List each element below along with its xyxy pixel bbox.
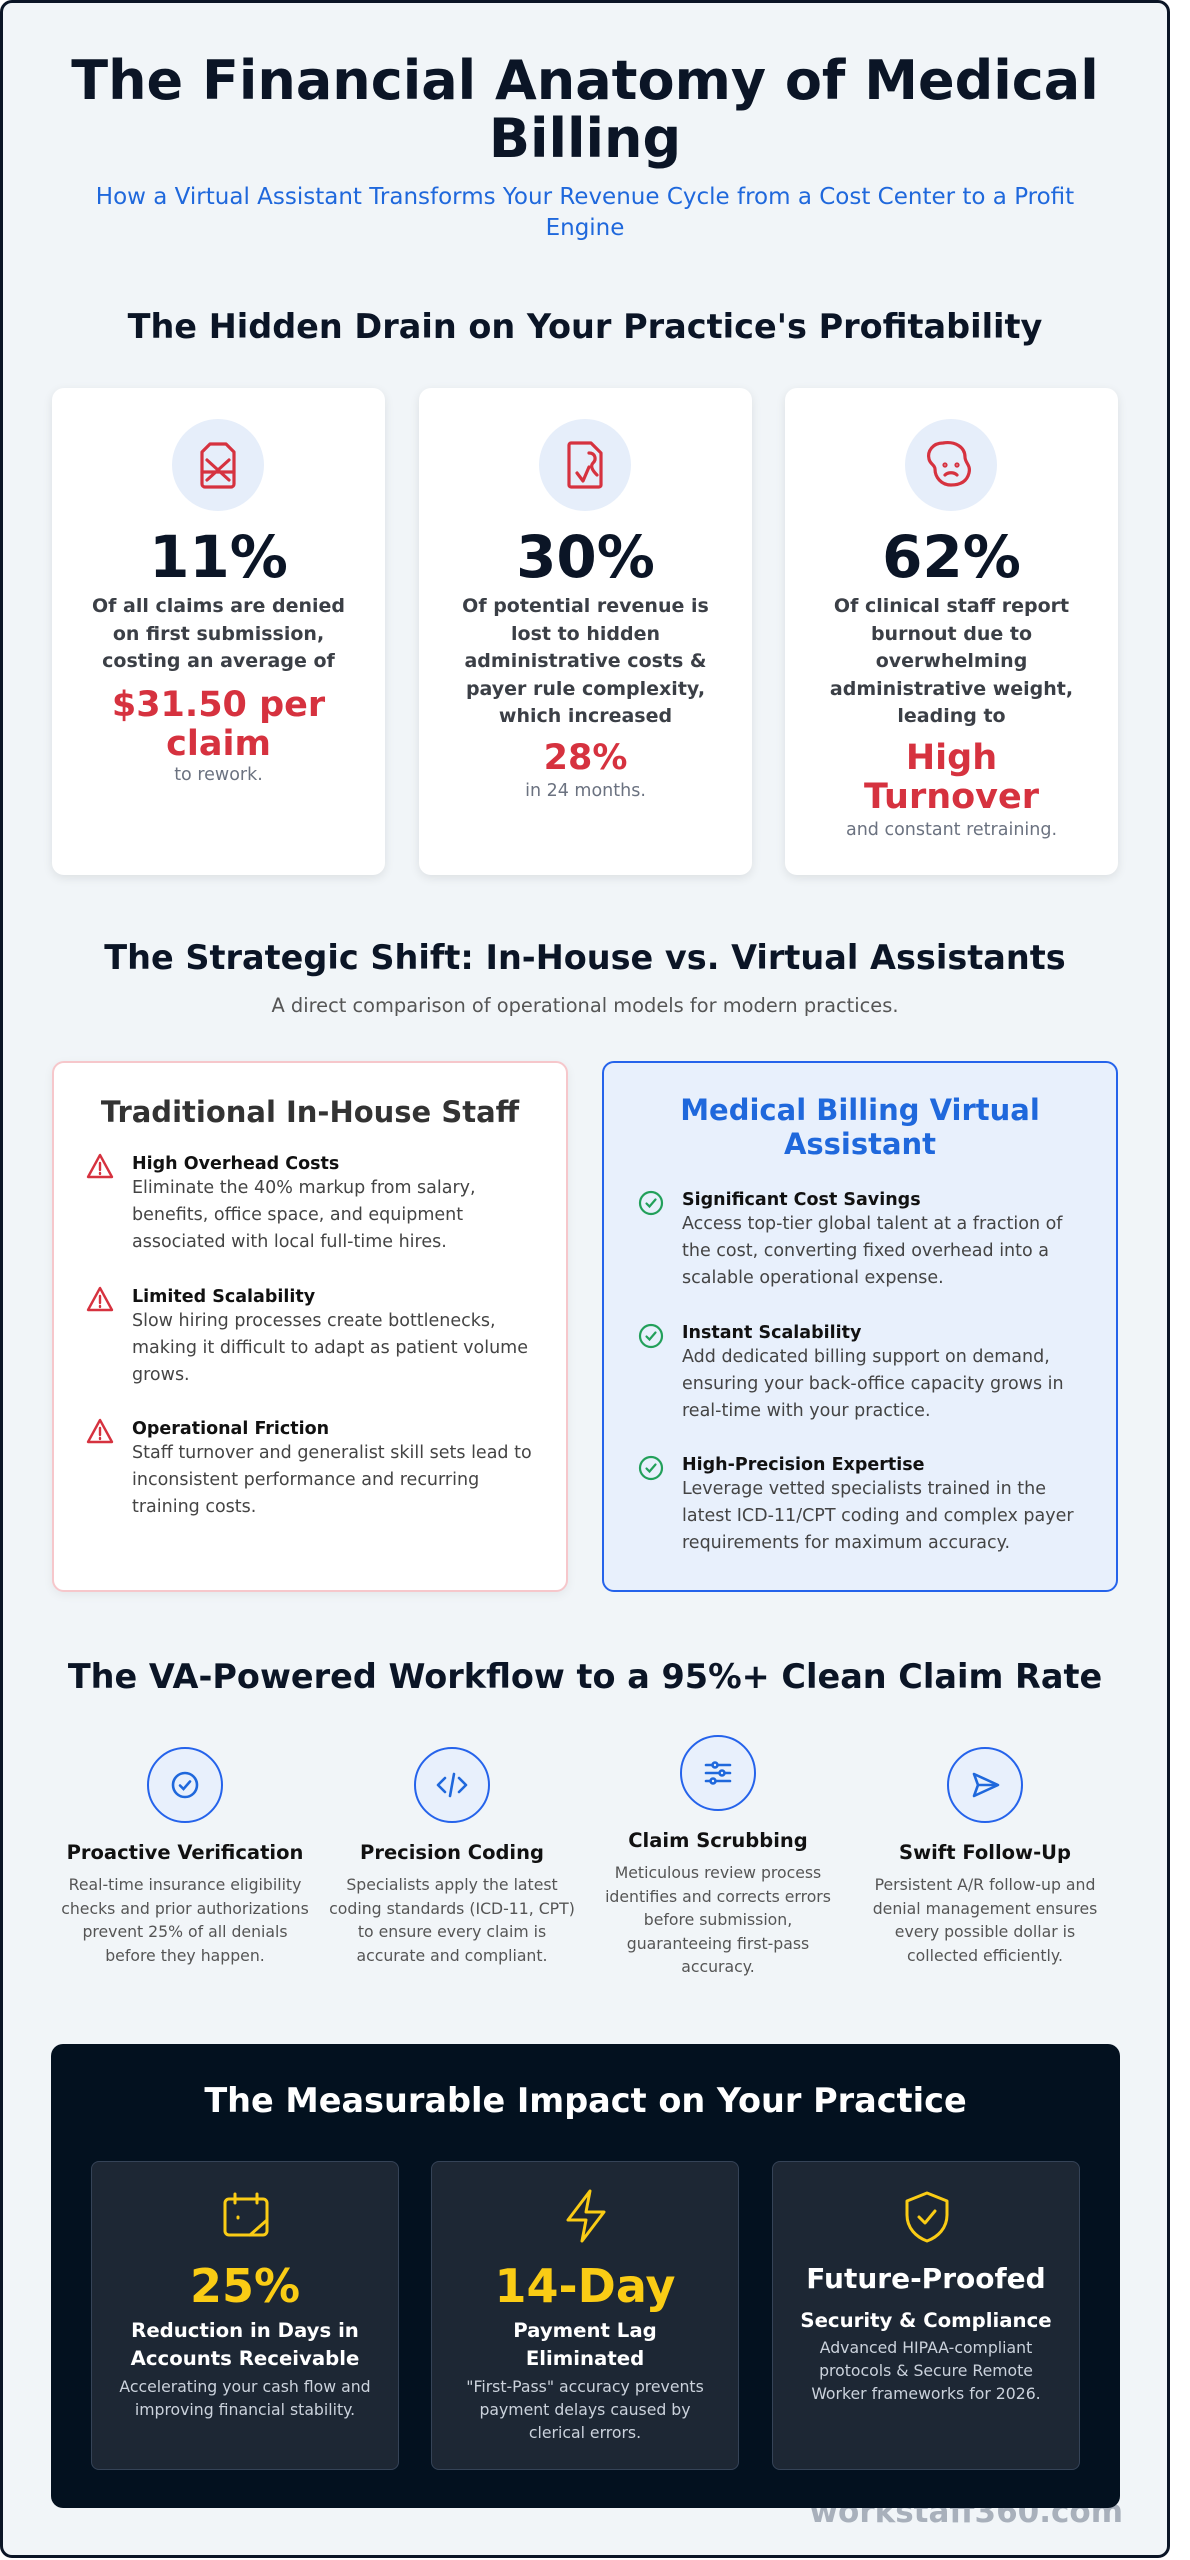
panel: virtual assistant [602, 1061, 1118, 1592]
impact card: future-proofed: Advanced HIPAA-compliant [820, 2338, 1032, 2357]
impact card: 25%: improving financial stability. [135, 2400, 355, 2419]
step: swift follow-up: denial management ensures [873, 1898, 1097, 1918]
subtitle: Engine [546, 215, 624, 241]
title [71, 49, 1099, 170]
step: proactive verification [61, 1747, 309, 1964]
item: cost savings: scalable operational expense. [682, 1268, 944, 1288]
icon: code [414, 1747, 490, 1823]
small note: and constant retraining. [846, 820, 1057, 840]
item: high overhead: Eliminate the 40% markup from salary, [132, 1178, 476, 1198]
step: precision coding: to ensure every claim is [358, 1922, 546, 1941]
description: which increased [499, 705, 672, 727]
step: proactive verification: Real-time insurance eligibility [69, 1875, 301, 1894]
heading: hidden drain: The Hidden Drain on Your Practice's Profitability [128, 307, 1042, 346]
impact card: 14-day: Payment Lag [513, 2319, 657, 2342]
description: burnout due to [871, 623, 1032, 645]
item: high-precision expertise [638, 1455, 1074, 1553]
item: instant scalability: real-time with your practice. [682, 1401, 931, 1421]
item: high overhead: High Overhead Costs [132, 1154, 339, 1174]
item: instant scalability: ensuring your back-office capacity grows in [682, 1374, 1064, 1394]
step: claim scrubbing: Claim Scrubbing [628, 1829, 808, 1852]
panel: measurable impact [51, 2044, 1120, 2508]
subtitle: How a Virtual Assistant Transforms Your Revenue Cycle from a Cost Center to a Profit [96, 184, 1074, 210]
item: instant scalability [638, 1323, 1064, 1421]
description: overwhelming [876, 650, 1027, 672]
card: 62% [785, 388, 1118, 875]
impact card: future-proofed: Security & Compliance [800, 2309, 1052, 2332]
item: high overhead [86, 1154, 476, 1252]
panel heading [680, 1093, 1040, 1161]
title: The Financial Anatomy of Medical [71, 49, 1099, 112]
step: precision coding: Precision Coding [360, 1841, 544, 1864]
impact card: 14-day: 14-Day [495, 2259, 675, 2313]
panel heading: The Measurable Impact on Your Practice [204, 2081, 967, 2120]
item: instant scalability: Add dedicated billing support on demand, [682, 1347, 1050, 1367]
impact card: 25%: Reduction in Days in [131, 2319, 359, 2342]
step: swift follow-up: Persistent A/R follow-up and [875, 1875, 1095, 1894]
step: precision coding [329, 1747, 575, 1964]
item: limited scalability [86, 1286, 528, 1385]
subtitle [96, 184, 1074, 241]
item: high-precision expertise: Leverage vetted specialists trained in the [682, 1479, 1046, 1499]
step: claim scrubbing: guaranteeing first-pass [627, 1934, 809, 1952]
stat number: 30% [516, 523, 655, 591]
icon: check circle [147, 1747, 223, 1823]
watermark: workstaff360.com [809, 2494, 1123, 2530]
heading: workflow: The VA-Powered Workflow to a 95%+ Clean Claim Rate [68, 1657, 1102, 1696]
icon: sliders [680, 1735, 756, 1811]
step: precision coding: accurate and compliant. [356, 1946, 548, 1964]
item: operational friction: Operational Friction [132, 1419, 329, 1439]
description: administrative costs & [464, 650, 707, 672]
item: high-precision expertise: latest ICD-11/CPT coding and complex payer [682, 1506, 1074, 1526]
description: payer rule complexity, [466, 678, 705, 700]
item: limited scalability: Slow hiring processes create bottlenecks, [132, 1311, 496, 1331]
icon: file with chart [539, 419, 631, 511]
red value [864, 738, 1039, 817]
impact card: 25%: Accounts Receivable [131, 2347, 359, 2370]
impact card: 25%: 25% [190, 2259, 300, 2313]
item: operational friction: training costs. [132, 1497, 256, 1517]
icon: lightning [566, 2190, 606, 2242]
step: claim scrubbing: identifies and corrects errors [605, 1886, 831, 1906]
card: 30% [419, 388, 752, 875]
heading: strategic shift: The Strategic Shift: In-House vs. Virtual Assistants [104, 938, 1066, 977]
description: on first submission, [113, 623, 324, 645]
small note: in 24 months. [525, 781, 646, 801]
impact card: 14-day: "First-Pass" accuracy prevents [466, 2377, 704, 2396]
item: cost savings: Access top-tier global talent at a fraction of [682, 1214, 1062, 1234]
description: costing an average of [102, 650, 335, 672]
description: Of potential revenue is [462, 595, 709, 617]
impact card: future-proofed: Future-Proofed [806, 2262, 1046, 2295]
item: limited scalability: grows. [132, 1365, 190, 1385]
red value [112, 685, 326, 764]
icon: calendar [224, 2192, 269, 2237]
item: cost savings [638, 1190, 1063, 1288]
step: claim scrubbing [605, 1735, 831, 1976]
impact card: 14-day: payment delays caused by [479, 2400, 691, 2419]
stat number: 11% [149, 523, 288, 591]
description [830, 595, 1073, 727]
description [92, 595, 345, 672]
red value: High [906, 738, 997, 778]
card: 11% [52, 388, 385, 875]
icon: shield [906, 2192, 948, 2242]
red value: 28% [544, 738, 627, 778]
impact card: future-proofed: protocols & Secure Remote [819, 2361, 1033, 2380]
item: high overhead: associated with local full-time hires. [132, 1232, 447, 1252]
step: precision coding: coding standards (ICD-11, CPT) [329, 1898, 575, 1918]
step: claim scrubbing: accuracy. [681, 1957, 755, 1976]
impact card: 25%: Accelerating your cash flow and [119, 2377, 371, 2396]
step: swift follow-up: every possible dollar is [895, 1922, 1075, 1941]
small note: to rework. [174, 765, 263, 785]
item: operational friction: Staff turnover and generalist skill sets lead to [132, 1443, 532, 1463]
description: Of all claims are denied [92, 595, 345, 617]
impact card: 14-day [431, 2161, 739, 2470]
panel heading: Assistant [784, 1127, 936, 1161]
description: lost to hidden [511, 623, 660, 645]
step: claim scrubbing: before submission, [644, 1910, 792, 1929]
item: cost savings: Significant Cost Savings [682, 1190, 921, 1210]
item: operational friction [86, 1418, 532, 1517]
icon: denied file [172, 419, 264, 511]
red value: Turnover [864, 777, 1039, 817]
impact card: 14-day: Eliminated [526, 2347, 644, 2370]
item: high overhead: benefits, office space, and equipment [132, 1205, 463, 1225]
step: proactive verification: before they happen. [105, 1946, 265, 1964]
icon: send [947, 1747, 1023, 1823]
impact card: future-proofed [772, 2161, 1080, 2470]
step: swift follow-up [873, 1747, 1097, 1964]
panel heading: Medical Billing Virtual [680, 1093, 1040, 1127]
stat number: 62% [882, 523, 1021, 591]
step: proactive verification: Proactive Verification [67, 1841, 303, 1864]
step: precision coding: Specialists apply the latest [346, 1875, 558, 1894]
section subtitle: A direct comparison of operational models for modern practices. [271, 994, 898, 1017]
red value: $31.50 per [112, 685, 325, 725]
red value: claim [166, 724, 271, 764]
description [462, 595, 709, 727]
impact card: 14-day: clerical errors. [529, 2423, 641, 2442]
impact card: future-proofed: Worker frameworks for 2026. [811, 2384, 1041, 2403]
item: limited scalability: making it difficult to adapt as patient volume [132, 1338, 528, 1358]
impact card: 25% [91, 2161, 399, 2470]
step: proactive verification: prevent 25% of all denials [82, 1922, 288, 1941]
step: proactive verification: checks and prior authorizations [61, 1898, 309, 1918]
item: high-precision expertise: High-Precision Expertise [682, 1455, 924, 1475]
item: limited scalability: Limited Scalability [132, 1287, 315, 1307]
step: claim scrubbing: Meticulous review process [615, 1863, 821, 1882]
title: Billing [489, 107, 681, 170]
description: administrative weight, [830, 678, 1073, 700]
icon: sad face [905, 419, 997, 511]
description: Of clinical staff report [834, 595, 1069, 617]
description: leading to [897, 705, 1006, 727]
item: operational friction: inconsistent performance and recurring [132, 1470, 479, 1490]
item: cost savings: the cost, converting fixed overhead into a [682, 1241, 1049, 1261]
step: swift follow-up: Swift Follow-Up [899, 1841, 1071, 1864]
panel heading: Traditional In-House Staff [101, 1095, 519, 1129]
step: swift follow-up: collected efficiently. [907, 1946, 1063, 1964]
item: instant scalability: Instant Scalability [682, 1323, 861, 1343]
item: high-precision expertise: requirements for maximum accuracy. [682, 1533, 1010, 1553]
panel: traditional in-house [52, 1061, 568, 1592]
